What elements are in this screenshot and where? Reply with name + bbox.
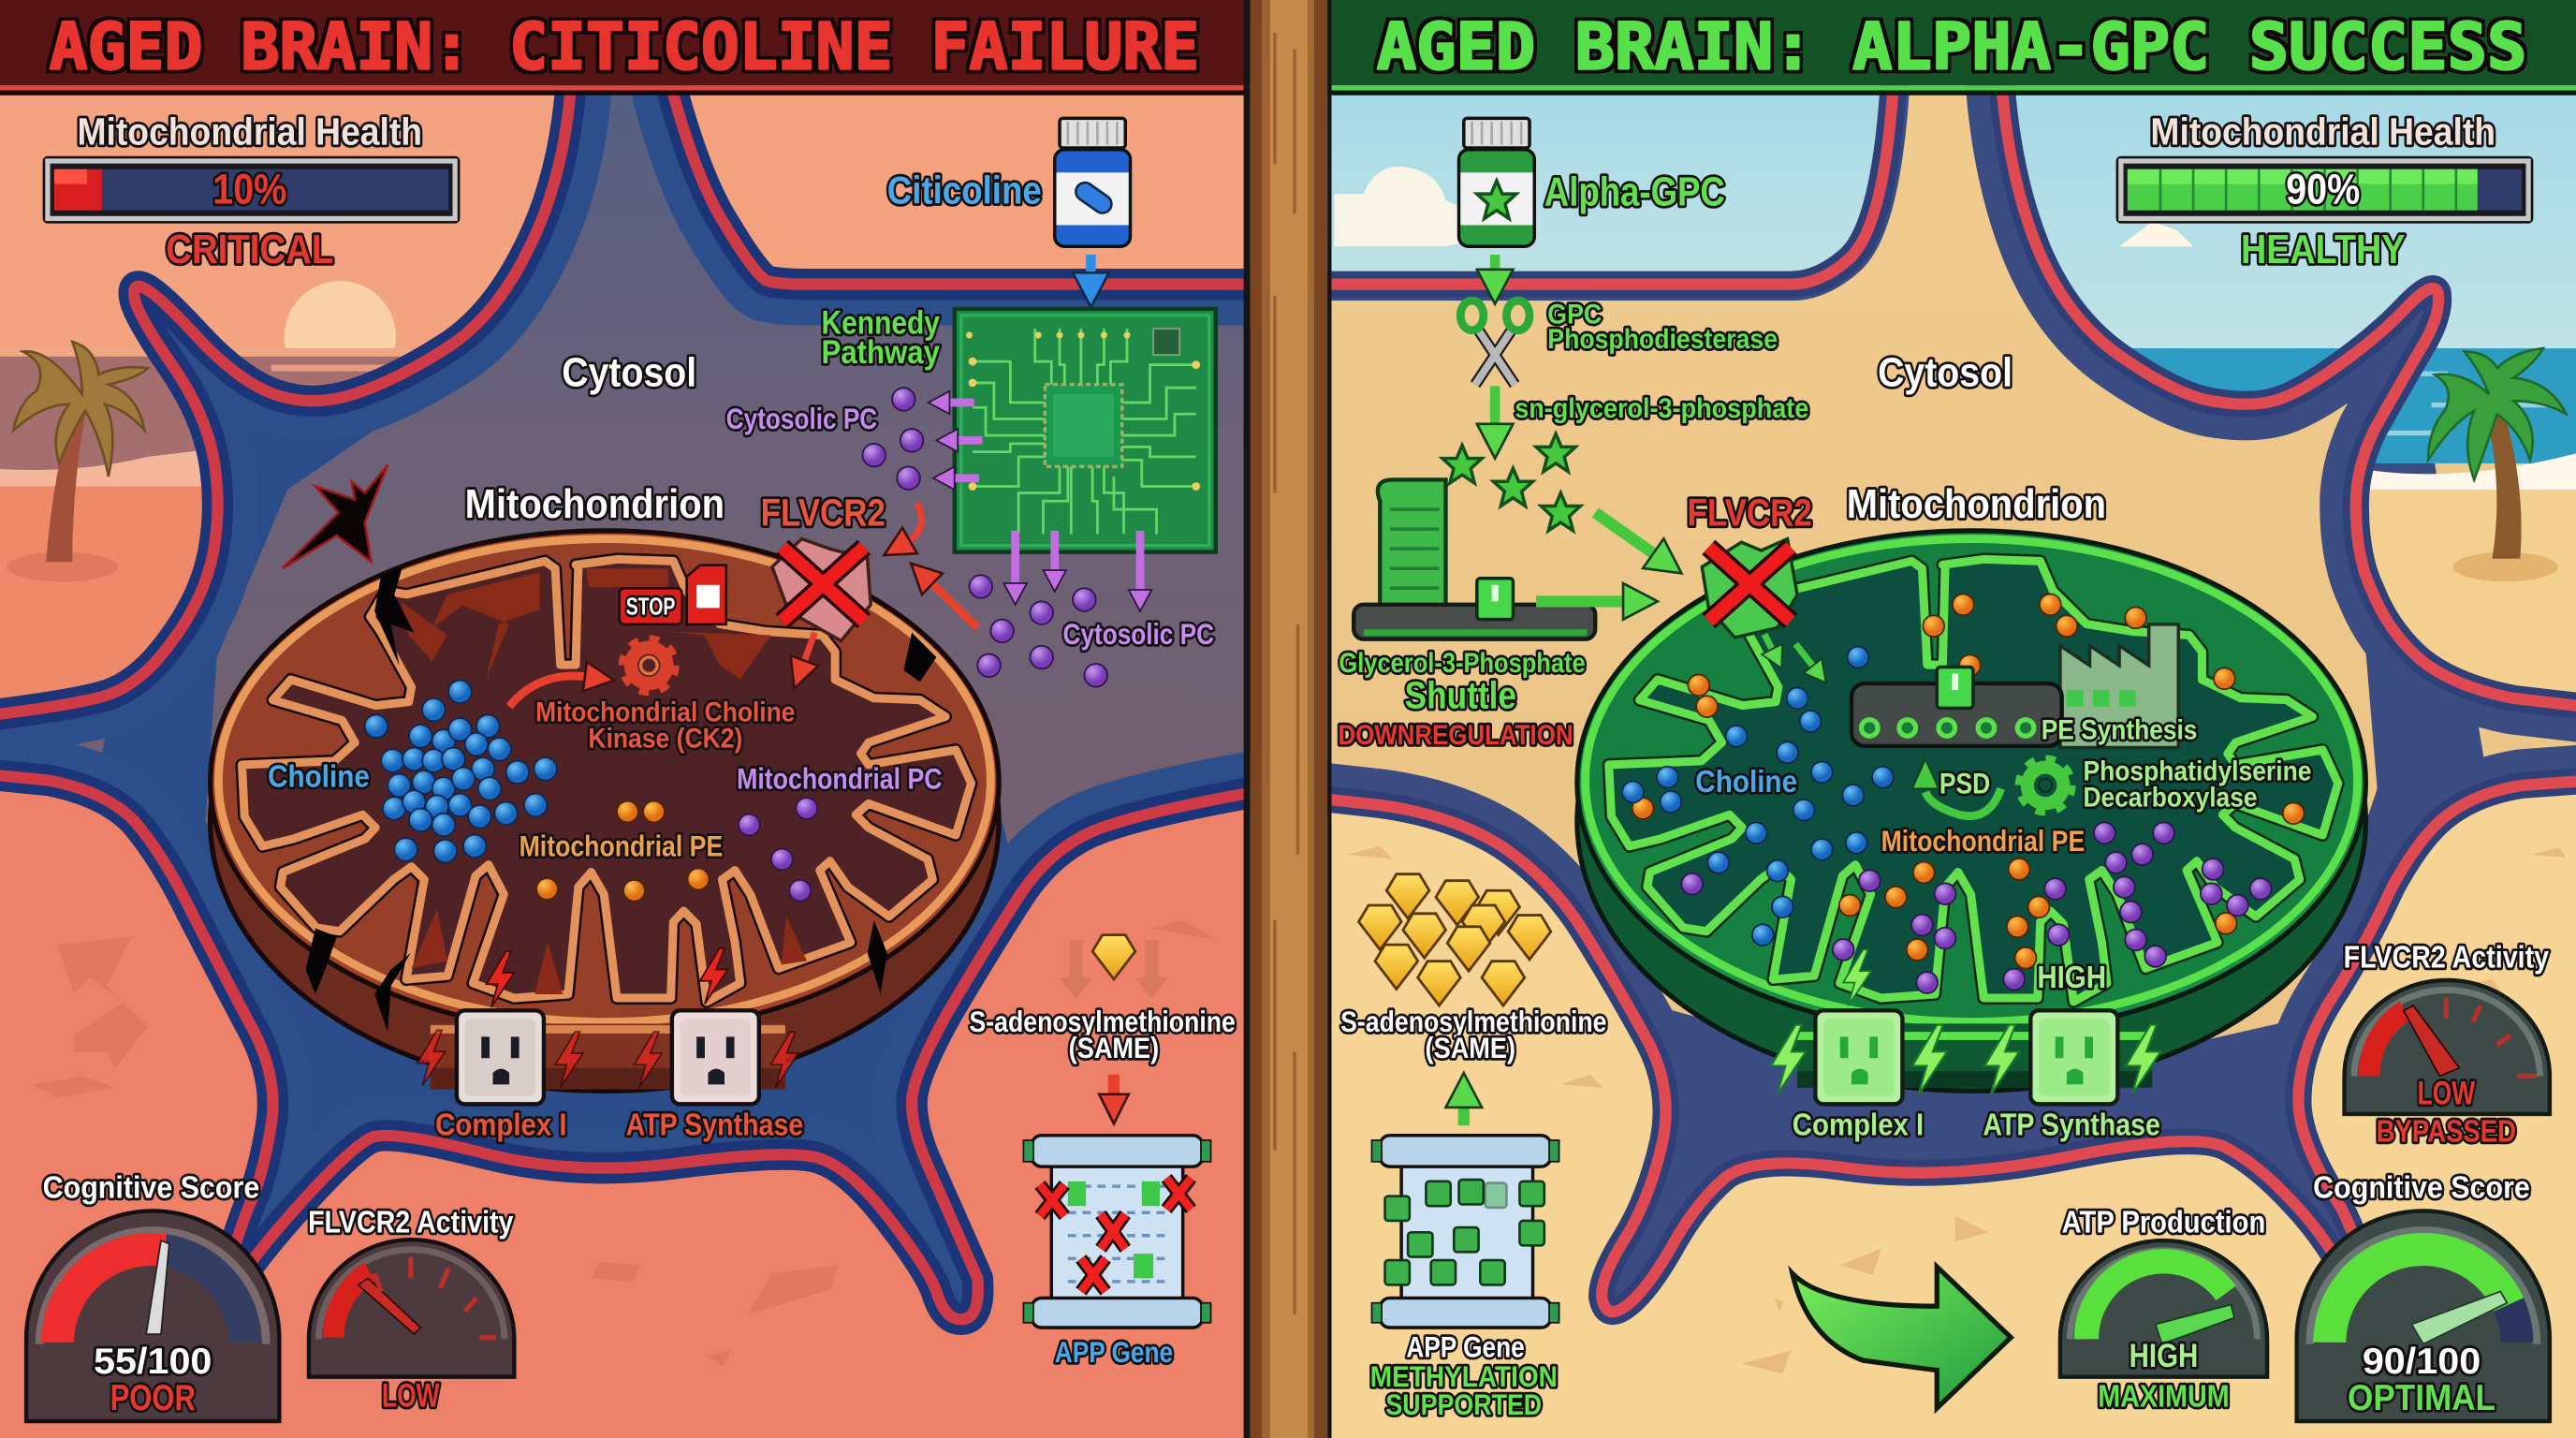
bar label: mitochondrial health left: Mitochondrial Health: [77, 110, 422, 153]
label SAME right: [1340, 1005, 1606, 1064]
status maximum: MAXIMUM: [2098, 1379, 2230, 1414]
sand starfish marks: [33, 920, 1216, 1367]
label choline right: Choline: [1695, 765, 1797, 800]
base band: [1797, 1023, 2152, 1088]
outlet: ATP synthase: [672, 1010, 759, 1104]
label FLVCR2 right: FLVCR2: [1687, 492, 1812, 535]
membrane navy shading: [1560, 444, 2489, 1224]
status poor: POOR: [110, 1378, 196, 1418]
stop sign and fuel can: STOP: [626, 592, 675, 620]
title left: AGED BRAIN: CITICOLINE FAILURE: [50, 10, 1199, 85]
membrane navy band: [1306, 66, 2576, 1438]
label choline: Choline: [268, 760, 370, 795]
sand marks: [1347, 846, 2566, 1373]
cytosol background right: [1327, 0, 2576, 1438]
label SAME: S-adenosylmethionine: [970, 1005, 1236, 1038]
label glycerol-3-phosphate shuttle: Glycerol-3-Phosphate: [1339, 648, 1586, 679]
label mitochondrion right: Mitochondrion: [1847, 481, 2106, 527]
value high: HIGH: [2130, 1338, 2198, 1374]
mitochondrion right: [1577, 531, 2365, 1091]
panel: alpha-GPC success (right): [1306, 0, 2576, 1438]
palm tree left: [13, 342, 148, 562]
big green arrow: [1793, 1267, 2011, 1408]
top-left sky: [1306, 66, 1893, 285]
label cytosol right: Cytosol: [1878, 349, 2012, 395]
label mitochondrial PE right: Mitochondrial PE: [1881, 824, 2085, 858]
factory: PE synthesis: [2060, 624, 2178, 748]
label FLVCR2 activity: FLVCR2 Activity: [308, 1205, 514, 1240]
label GPC phosphodiesterase: [1547, 300, 1778, 355]
label glycerol-3-phosphate shuttle: Shuttle: [1405, 673, 1516, 716]
glycerol stars: [1442, 433, 1580, 531]
gauge: ATP production: [2060, 1240, 2267, 1377]
gauge: cognitive score right: [2297, 1211, 2550, 1421]
label PE synthesis: PE Synthesis: [2042, 715, 2197, 746]
SAME single gem with faded arrows: [1060, 935, 1168, 999]
arrows: chip to cytosolic PC: [948, 403, 1140, 592]
label GPC phosphodiesterase: Phosphodiesterase: [1547, 324, 1778, 355]
arrow: APP gene to SAME: [1460, 1104, 1467, 1125]
FLVCR2 transporter bypassed: [1702, 539, 1797, 638]
palm tree right: [2428, 348, 2566, 559]
membrane blue band: [0, 66, 1273, 1438]
label SAME right: S-adenosylmethionine: [1340, 1005, 1606, 1038]
beach scene right: [2016, 85, 2576, 693]
top-right sky: [674, 66, 1273, 285]
arrow: FLVCR2 into matrix: [803, 633, 815, 664]
membrane crack: [283, 465, 388, 568]
arrow: scissors to stars: [1492, 386, 1498, 427]
neuron membrane lines: [0, 66, 1273, 1438]
label Kennedy pathway: [822, 304, 940, 371]
panel: citicoline failure (left): [0, 0, 1273, 1438]
label GPC phosphodiesterase: GPC: [1547, 300, 1602, 330]
label APP gene methylation supported: SUPPORTED: [1385, 1387, 1542, 1421]
arrow: cytosolic PC to FLVCR2: [929, 581, 977, 627]
arrow: choline to kinase: [509, 676, 588, 707]
arrow: curved to FLVCR2: [907, 503, 921, 542]
alpha-GPC bottle: [1459, 118, 1534, 246]
label APP gene methylation supported: [1370, 1330, 1558, 1421]
label cognitive score: Cognitive Score: [43, 1170, 259, 1205]
label FLVCR2 activity right: FLVCR2 Activity: [2344, 941, 2549, 976]
status optimal: OPTIMAL: [2348, 1378, 2496, 1418]
stop sign and fuel can: [620, 565, 726, 624]
label FLVCR2: FLVCR2: [761, 492, 886, 535]
choline cluster: [365, 681, 557, 862]
label choline kinase: Mitochondrial Choline: [535, 697, 795, 727]
label SAME: [970, 1005, 1236, 1064]
bar label: mitochondrial health right: Mitochondrial Health: [2150, 110, 2496, 153]
outlet: ATP synthase right: [2030, 1010, 2117, 1104]
outlet: complex I: [457, 1010, 544, 1104]
label sn-glycerol-3-phosphate: sn-glycerol-3-phosphate: [1515, 393, 1808, 424]
header right: [1327, 0, 2576, 95]
label phosphatidylserine decarboxylase: Decarboxylase: [2083, 783, 2258, 814]
label mitochondrion: Mitochondrion: [465, 481, 724, 527]
status bypassed: BYPASSED: [2377, 1115, 2516, 1150]
arrow: shuttle to mitochondrion: [1536, 598, 1627, 605]
title right: AGED BRAIN: ALPHA-GPC SUCCESS: [1377, 10, 2526, 85]
outlet: complex I right: [1815, 1010, 1902, 1104]
conveyor: PE synthesis: [1852, 668, 2062, 746]
gear: PSD: [2021, 761, 2070, 810]
status low: LOW: [382, 1377, 440, 1414]
mitochondrial PE and PC molecules: [536, 798, 817, 902]
label APP gene methylation supported: METHYLATION: [1370, 1359, 1558, 1393]
label cytosolic PC lower: Cytosolic PC: [1063, 617, 1214, 651]
label choline kinase: [535, 697, 795, 755]
gauge: FLVCR2 activity left: [309, 1240, 514, 1377]
health bar left: [44, 157, 459, 222]
wooden divider: [1244, 0, 1332, 1438]
arrow: SAME to APP gene red: [1110, 1075, 1117, 1097]
citicoline bottle: [1055, 118, 1131, 246]
neuron membrane lines right: [1306, 66, 2576, 1438]
label phosphatidylserine decarboxylase: Phosphatidylserine: [2083, 756, 2311, 787]
label mitochondrial PE: Mitochondrial PE: [520, 829, 723, 862]
mitochondrion left: [211, 531, 999, 1091]
circular arrow: PSD: [1912, 759, 2001, 816]
status healthy: HEALTHY: [2241, 227, 2405, 272]
bottom sand right: [1306, 779, 2576, 1438]
health bar right: [2117, 157, 2532, 222]
label mitochondrial PC: Mitochondrial PC: [737, 761, 943, 795]
damaged cristae patches: [402, 568, 807, 994]
cytosol background: [0, 0, 1249, 1438]
value 90%: 90%: [2286, 166, 2360, 213]
value 10%: 10%: [212, 166, 286, 213]
gauge: cognitive score left: [26, 1211, 279, 1421]
label ATP synthase right: ATP Synthase: [1983, 1108, 2160, 1143]
arrow: stars to FLVCR2: [1595, 513, 1656, 555]
label PSD: PSD: [1939, 767, 1990, 800]
label high: HIGH: [2037, 961, 2106, 995]
label cytosolic PC upper: Cytosolic PC: [726, 402, 877, 435]
matrix molecules: [1622, 594, 2305, 993]
bottom sand: [0, 772, 1273, 1438]
label glycerol-3-phosphate shuttle: [1339, 648, 1586, 751]
beach scene sky and sea: [0, 85, 554, 698]
value 55/100: 55/100: [94, 1342, 212, 1382]
scroll: APP gene left: [1023, 1136, 1211, 1328]
label choline kinase: Kinase (CK2): [588, 724, 742, 755]
circuit board: Kennedy pathway: [955, 309, 1216, 552]
label ATP synthase: ATP Synthase: [626, 1108, 803, 1143]
label ATP production: ATP Production: [2062, 1205, 2265, 1240]
label APP gene methylation supported: APP Gene: [1406, 1330, 1525, 1364]
label complex I: Complex I: [435, 1108, 567, 1143]
membrane blue shading: [98, 411, 1027, 1265]
label citicoline: Citicoline: [887, 169, 1042, 213]
label glycerol-3-phosphate shuttle: DOWNREGULATION: [1339, 720, 1573, 751]
label complex I right: Complex I: [1793, 1108, 1924, 1143]
label SAME right: (SAME): [1426, 1031, 1515, 1064]
scissors: GPC phosphodiesterase: [1460, 301, 1530, 385]
label Kennedy pathway: Kennedy: [822, 304, 940, 341]
gauge: FLVCR2 activity right: [2345, 980, 2550, 1114]
SAME gem cluster: [1358, 874, 1551, 1005]
cytosolic PC molecules: [862, 388, 1107, 687]
label alpha-GPC: Alpha-GPC: [1544, 169, 1725, 214]
arrow: citicoline down: [1088, 255, 1093, 276]
label Kennedy pathway: Pathway: [822, 334, 940, 371]
header left: [0, 0, 1249, 95]
scroll: APP gene right: [1372, 1136, 1559, 1328]
status low right: LOW: [2418, 1075, 2476, 1111]
label cytosol: Cytosol: [562, 349, 696, 395]
FLVCR2 transporter blocked: [772, 539, 871, 640]
label APP gene: APP Gene: [1055, 1335, 1173, 1369]
red lightning bolts: [417, 948, 798, 1088]
status critical: CRITICAL: [166, 227, 333, 272]
arrow: bottle to scissors: [1492, 255, 1498, 272]
label SAME: (SAME): [1069, 1031, 1159, 1064]
label cognitive score right: Cognitive Score: [2313, 1170, 2530, 1205]
value 90/100: 90/100: [2363, 1342, 2481, 1382]
green lightning bolts: [1771, 949, 2160, 1094]
gear: choline kinase: [624, 640, 674, 690]
base band: [431, 1023, 785, 1088]
conveyor: glycerol-3-phosphate shuttle: [1354, 479, 1595, 639]
label phosphatidylserine decarboxylase: [2083, 756, 2311, 814]
arrows: into matrix: [1764, 634, 1814, 668]
cloud left: [1334, 167, 1480, 246]
rim cracks: [305, 566, 936, 1032]
